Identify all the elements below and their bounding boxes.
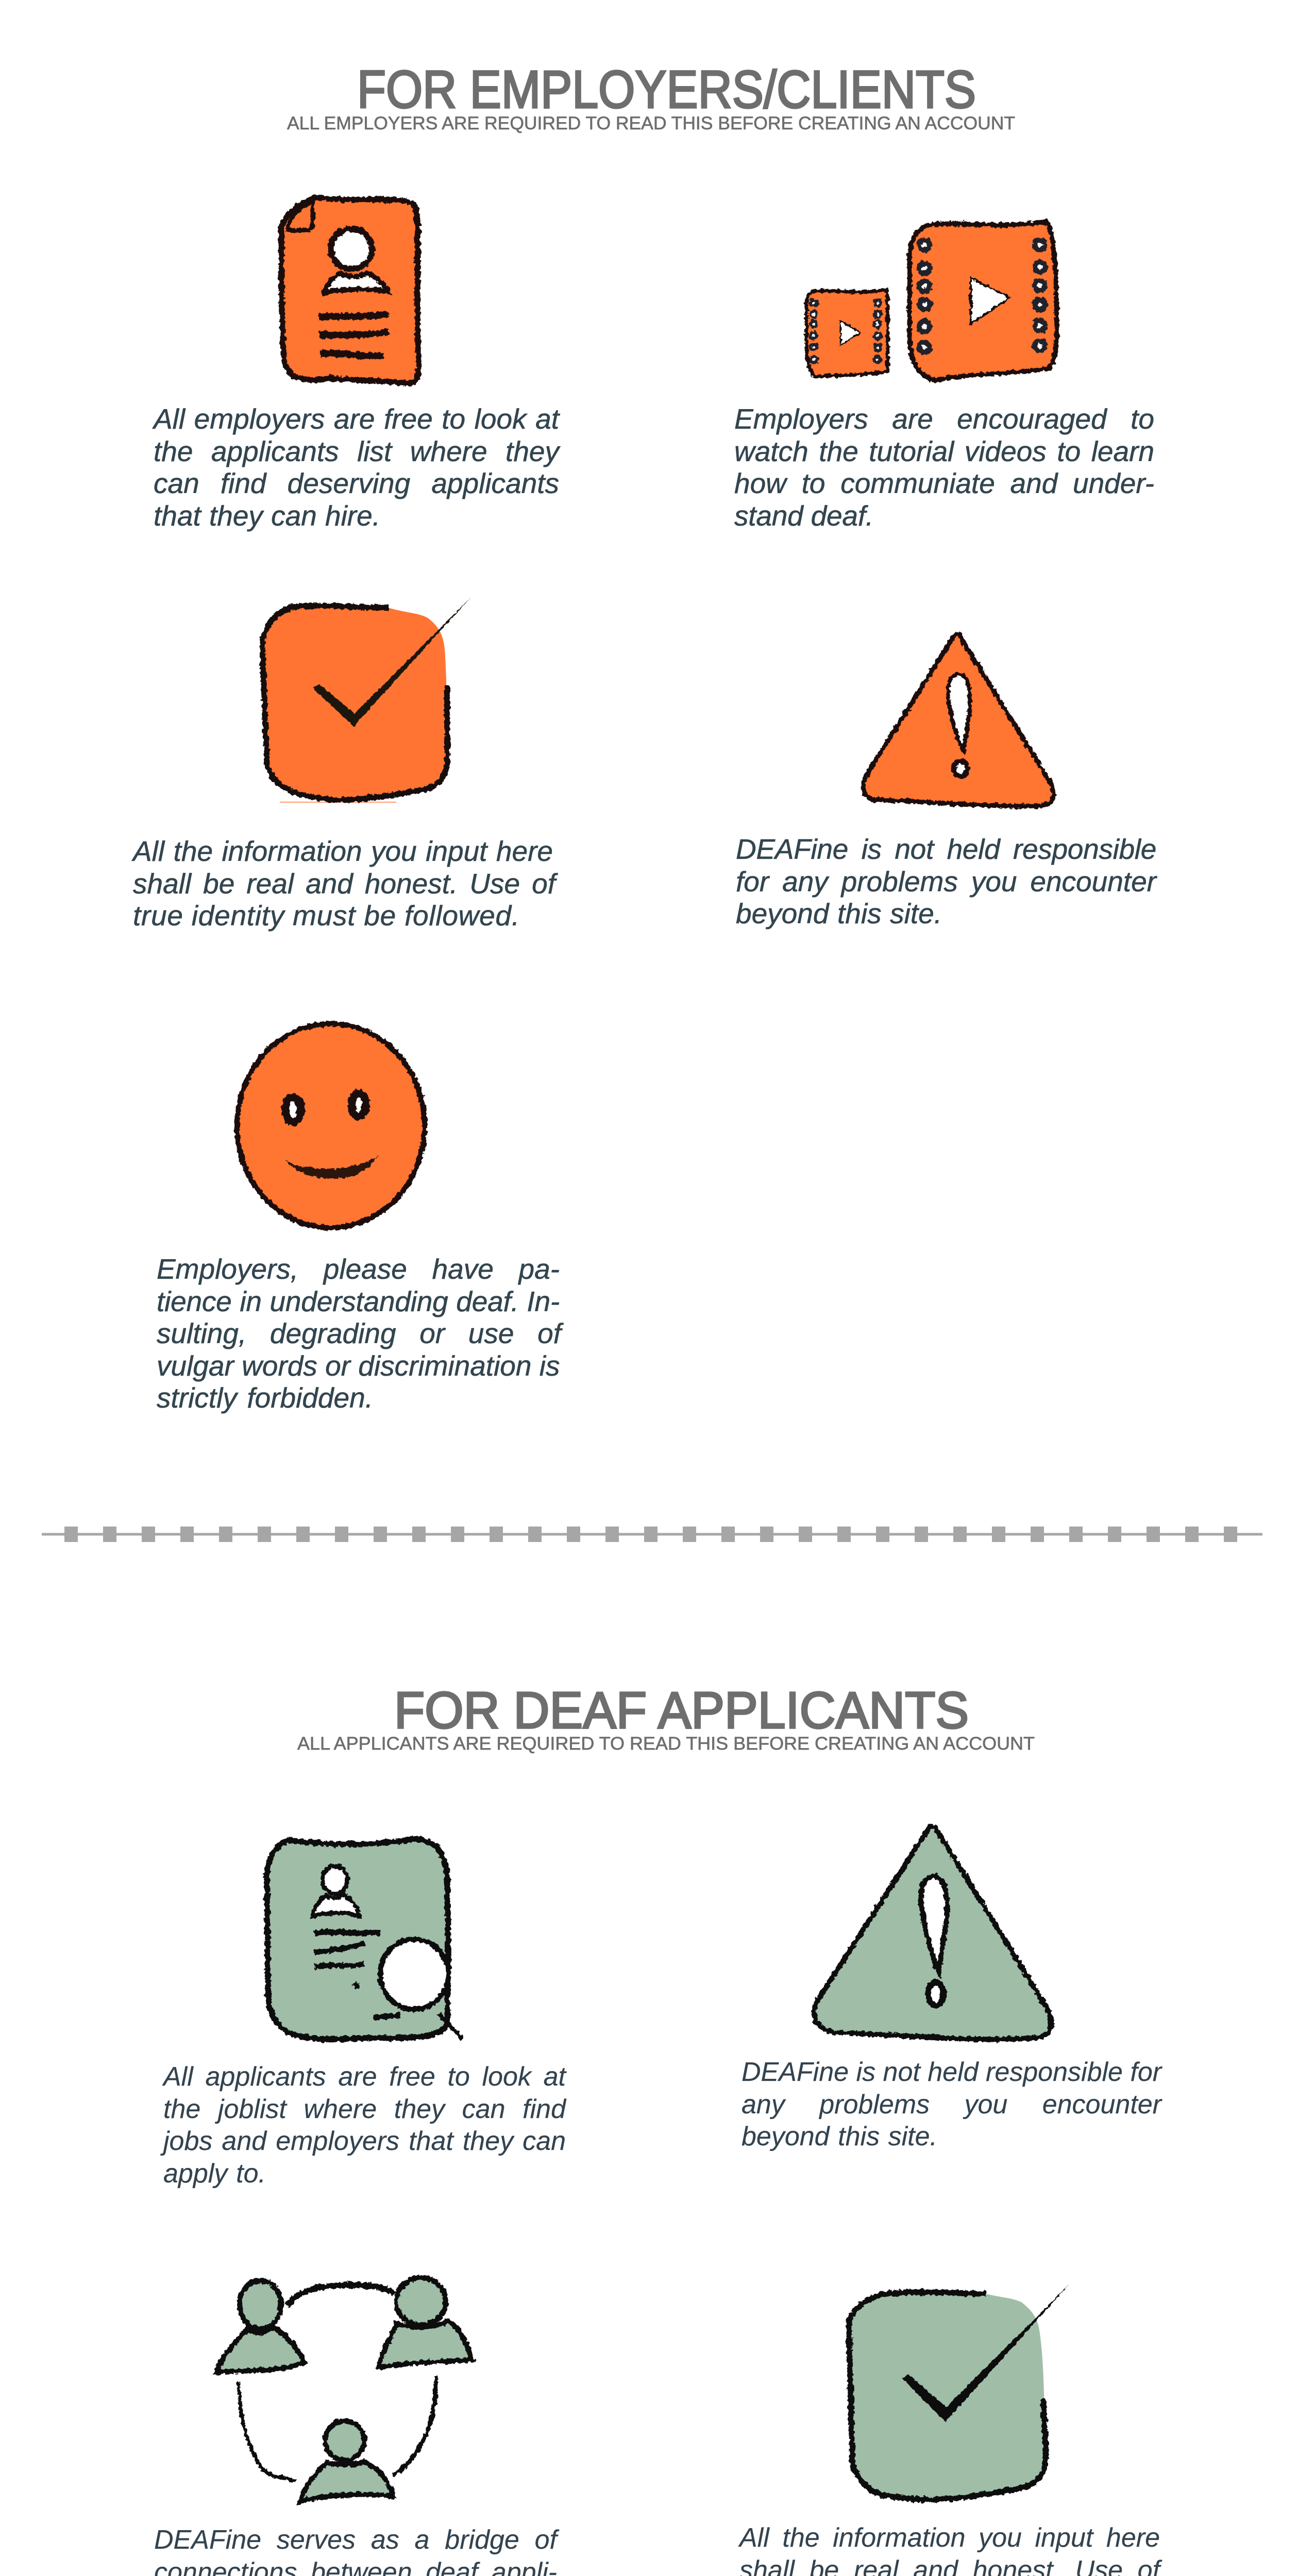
text: free to look: can find deserving applicants — [154, 467, 559, 499]
panel: for deaf applicants — [0, 1674, 1314, 2576]
heading: for employers/clients: FOR EMPLOYERS/CLIENTS — [357, 60, 976, 119]
divider — [42, 1527, 1262, 1542]
heading: for deaf applicants: ALL APPLICANTS ARE REQUIRED TO READ THIS BEFORE CREATING AN ACCOUNT — [297, 1734, 1035, 1754]
text: joblist: apply to. — [163, 2159, 266, 2189]
text: patience: vulgar words or discrimination is — [157, 1350, 560, 1382]
icon: green checkbox — [844, 2279, 1073, 2506]
text: patience: strictly forbidden. — [157, 1382, 373, 1414]
text: free to look: All employers are free to look at — [154, 403, 559, 435]
text: not responsible: beyond this site. — [736, 897, 942, 929]
text: not responsible applicants: DEAFine is not held responsible for — [742, 2057, 1161, 2087]
panel: bridge of connections — [154, 2277, 557, 2576]
text: bridge — [154, 2524, 557, 2576]
text: patience: Employers, please have pa- — [157, 1253, 560, 1285]
text: free to look — [151, 403, 561, 532]
text: free to look: that they can hire. — [154, 500, 380, 532]
text: real and honest applicants: All the information you input here — [739, 2523, 1160, 2553]
text: not responsible: for any problems you encounter — [736, 866, 1156, 897]
text: patience: tience in understanding deaf. In- — [157, 1285, 560, 1317]
text: joblist: the joblist where they can find — [163, 2094, 566, 2124]
text: tutorial videos: Employers are encouraged to — [734, 403, 1154, 435]
text: not responsible applicants — [742, 2056, 1161, 2153]
panel: tutorial videos — [734, 218, 1154, 532]
panel: real and honest applicants — [739, 2279, 1160, 2576]
icon: applicant document — [277, 194, 422, 387]
text: not responsible: DEAFine is not held responsible — [736, 833, 1156, 865]
text: tutorial videos: how to communiate and under- — [734, 467, 1154, 499]
panel: not responsible applicants — [742, 1821, 1161, 2153]
text: not responsible applicants: any problems you encounter — [742, 2090, 1161, 2120]
icon: connected people — [209, 2277, 479, 2509]
text: real and honest applicants — [739, 2522, 1160, 2576]
text: real and honest — [131, 835, 559, 931]
text: free to look: the applicants list where they — [154, 435, 559, 467]
text: patience — [157, 1253, 564, 1414]
panel: free to look at joblist — [163, 1833, 566, 2190]
panel: not responsible — [736, 632, 1157, 929]
icon: video film strips — [803, 218, 1060, 383]
icon: orange checkbox — [259, 597, 470, 804]
panel: real and honest information — [131, 597, 559, 931]
text: tutorial videos: watch the tutorial videos to learn — [734, 435, 1154, 467]
heading: for employers/clients: ALL EMPLOYERS ARE REQUIRED TO READ THIS BEFORE CREATING AN ACCOUNT — [287, 113, 1015, 133]
icon: orange warning triangle — [861, 632, 1057, 810]
icon: document with magnifier — [263, 1833, 466, 2047]
text: joblist: jobs and employers that they can — [163, 2126, 566, 2156]
text: real and honest: true identity must be followed. — [133, 900, 520, 931]
panel: patience in understanding deaf — [157, 1020, 564, 1414]
panel: for employers and clients — [131, 60, 1157, 1414]
text: patience: sulting, degrading or use of — [157, 1317, 561, 1349]
icon: green warning triangle — [808, 1821, 1058, 2045]
text: bridge: DEAFine serves as a bridge of — [154, 2525, 557, 2555]
text: joblist: All applicants are free to look at — [163, 2062, 566, 2092]
icon: orange smiling face — [233, 1020, 428, 1231]
text: tutorial videos: stand deaf. — [734, 500, 873, 532]
text: tutorial videos — [734, 403, 1154, 532]
text: real and honest: shall be real and honest. Use of — [133, 868, 555, 900]
panel: free to look at applicants — [151, 194, 561, 532]
text: joblist — [163, 2061, 566, 2190]
heading: for employers/clients — [287, 60, 1015, 133]
text: not responsible applicants: beyond this site. — [742, 2122, 937, 2151]
text: real and honest: All the information you input here — [133, 835, 553, 867]
heading: for deaf applicants — [247, 1685, 1072, 1757]
text: not responsible — [736, 833, 1157, 929]
heading: for deaf applicants: FOR DEAF APPLICANTS — [394, 1682, 969, 1739]
